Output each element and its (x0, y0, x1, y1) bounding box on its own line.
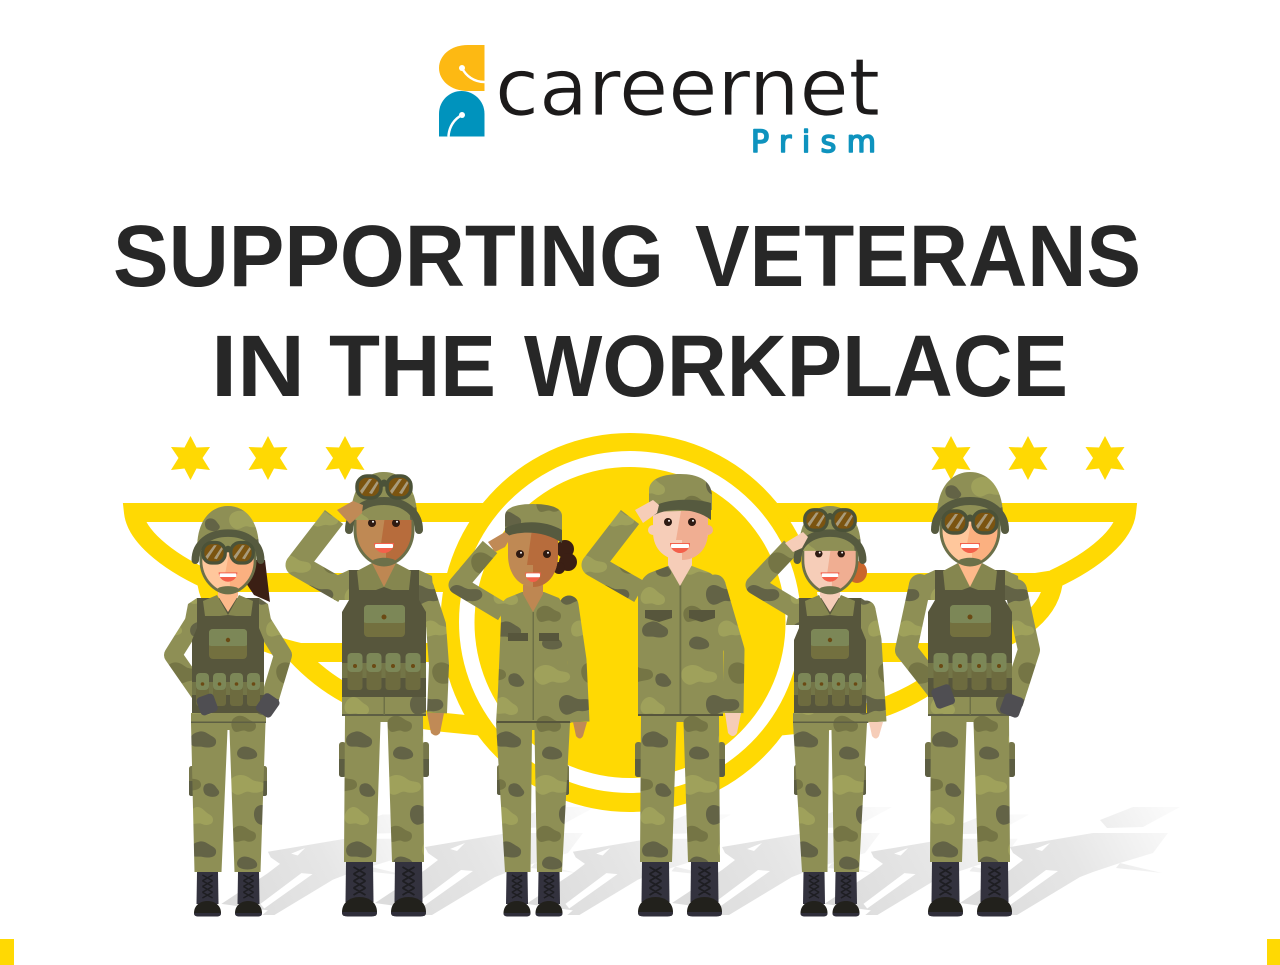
vest (786, 598, 874, 723)
soldier 3: woman saluting in cap and jacket (458, 504, 587, 916)
hanging hand (573, 722, 587, 738)
legs and boots (496, 723, 570, 916)
soldier 1: woman in helmet, hands on hips (173, 506, 283, 916)
title line 1: VETERANS (695, 207, 1141, 305)
hair curls (553, 540, 577, 574)
vest (920, 570, 1020, 716)
saluting hand (337, 501, 363, 524)
stars: right group (932, 436, 1124, 480)
neck (523, 585, 543, 612)
neck and collar (357, 556, 411, 590)
title line 2: WORKPLACE (524, 317, 1068, 415)
corner tab: bottom left (0, 939, 14, 965)
hanging hand (869, 722, 883, 738)
corner tab: bottom right (1267, 939, 1280, 965)
saluting hand (785, 532, 808, 552)
soldier 2: man saluting, helmet with goggles up (297, 472, 444, 916)
vest (334, 570, 434, 716)
hair (246, 560, 270, 602)
logo: careernet Prism (439, 42, 880, 160)
arms (593, 517, 734, 713)
hanging hand (725, 713, 741, 736)
logo sub-brand: Prism (751, 125, 876, 160)
neck and collar (805, 588, 855, 616)
logo icon: yellow and blue shapes (439, 45, 484, 136)
arms (173, 603, 283, 705)
legs and boots (189, 723, 267, 916)
legs and boots (635, 716, 725, 916)
logo wordmark: careernet (495, 42, 880, 134)
neck (668, 555, 692, 586)
stars: left group (171, 436, 364, 480)
legs and boots (925, 716, 1015, 916)
title line 1 (113, 207, 1141, 305)
face (648, 505, 713, 560)
arms (458, 547, 580, 722)
gloves (930, 683, 1025, 719)
winged badge emblem (134, 433, 1126, 812)
face (508, 522, 558, 587)
jacket (496, 592, 571, 723)
neck and collar (943, 556, 997, 590)
soldier 5: woman saluting, helmet and vest (755, 506, 883, 916)
title line 2 (211, 317, 1068, 415)
gloves (195, 692, 281, 719)
title line 1: SUPPORTING (113, 207, 664, 305)
soldier 4: man saluting in cap and jacket (593, 474, 741, 916)
jacket (638, 566, 723, 716)
head with helmet and goggles (195, 506, 261, 593)
neck and collar (203, 588, 253, 616)
legs and boots (793, 723, 867, 916)
head with helmet (349, 472, 419, 565)
saluting hand (635, 500, 659, 523)
arms (297, 517, 439, 713)
cap (505, 504, 562, 543)
title (113, 207, 1141, 415)
hanging hand (427, 713, 444, 736)
cap (649, 474, 712, 520)
title line 2: THE (329, 317, 496, 415)
saluting hand (488, 532, 511, 552)
arms (906, 574, 1029, 703)
head with helmet (797, 506, 863, 593)
ground shadows of soldiers (221, 807, 1180, 915)
title line 2: IN (211, 317, 305, 415)
soldier 6: man in helmet, hands on hips (906, 472, 1029, 916)
legs and boots (339, 716, 429, 916)
arms (755, 547, 877, 722)
right wing (740, 512, 1126, 730)
left wing (134, 512, 520, 730)
badge circle (440, 433, 820, 812)
vest (184, 598, 272, 723)
hair bun (847, 561, 867, 583)
head with helmet and goggles (935, 472, 1005, 565)
